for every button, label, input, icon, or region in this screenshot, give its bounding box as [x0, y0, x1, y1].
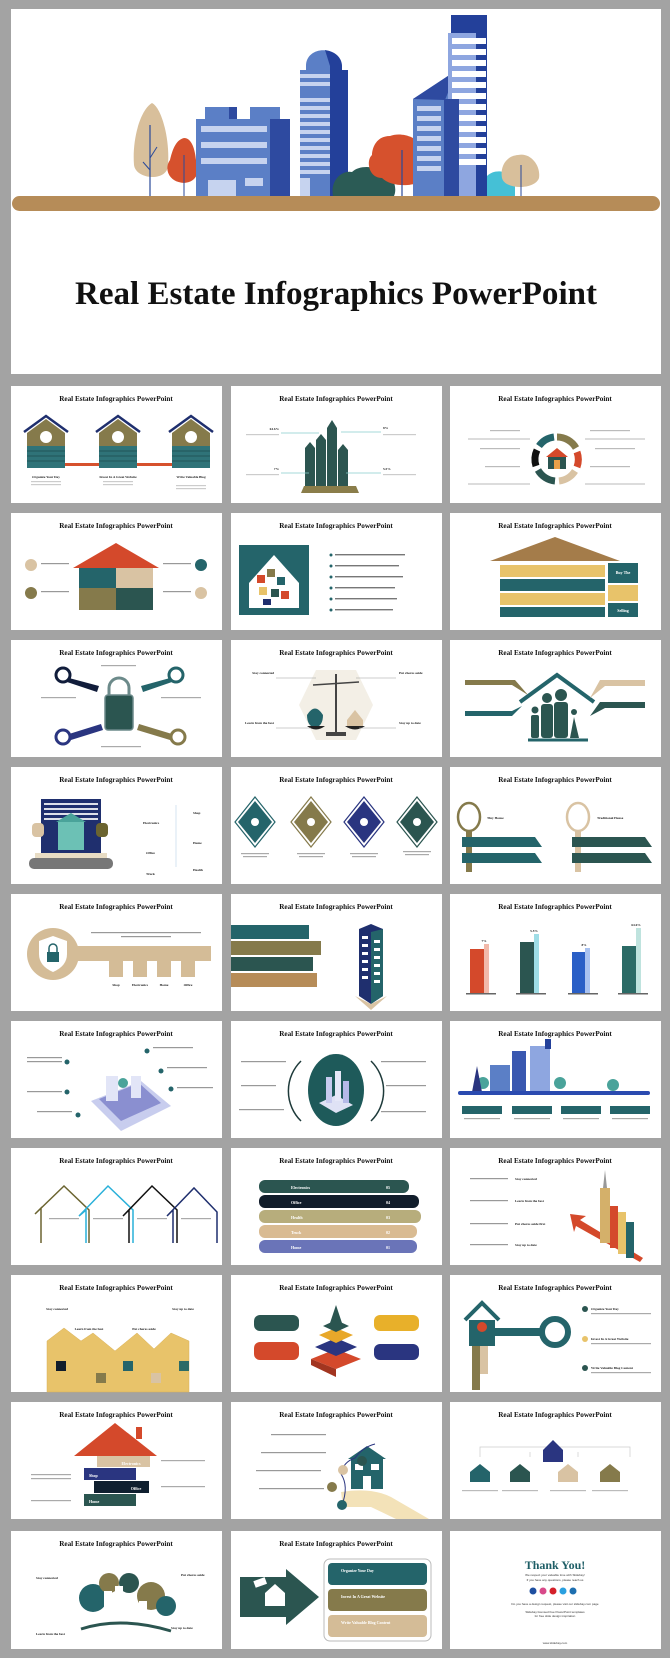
panel: thank you slide	[450, 1531, 661, 1649]
panel: slide 25 red roof stack: Electronics	[121, 1461, 141, 1466]
panel: slide 15 bar chart	[450, 894, 661, 1011]
panel: slide 25 red roof stack: Real Estate Infographics PowerPoint	[59, 1411, 173, 1419]
panel: slide 26 hand with house: Real Estate Infographics PowerPoint	[279, 1411, 393, 1419]
panel: slide 8 scales: Learn from the best	[245, 721, 275, 725]
panel: slide 28 tree city: Learn from the best	[36, 1632, 66, 1636]
panel: slide 13 big key: Shop	[112, 983, 120, 987]
panel: slide 1 houses: Real Estate Infographics PowerPoint	[59, 395, 173, 403]
panel: slide 1 houses	[11, 386, 222, 503]
icon: tan tree	[134, 103, 168, 196]
panel: slide 22 yellow houses: Stay connected	[46, 1307, 68, 1311]
panel: slide 10 building list: Health	[193, 868, 203, 872]
panel: slide 10 building list: Home	[193, 841, 202, 845]
icon: big red tree	[369, 134, 431, 196]
title: Real Estate Infographics PowerPoint	[75, 276, 597, 312]
panel: slide 19 house outlines: Real Estate Infographics PowerPoint	[59, 1157, 173, 1165]
panel: slide 25 red roof stack: Shop	[89, 1473, 98, 1478]
panel: slide 12 signpost keys: Real Estate Infographics PowerPoint	[498, 776, 612, 784]
panel: slide 3 ring: Real Estate Infographics PowerPoint	[498, 395, 612, 403]
panel: slide 13 big key: Real Estate Infographics PowerPoint	[59, 903, 173, 911]
panel: slide 22 yellow houses: Stay up to date	[172, 1307, 194, 1311]
panel: slide 19 house outlines	[11, 1148, 222, 1265]
icon: tall tower	[444, 15, 487, 196]
panel: slide 24 teal key: Organize Your Day	[591, 1307, 619, 1311]
panel: slide 13 big key: Electronics	[132, 983, 149, 987]
panel: slide 11 diamonds: Real Estate Infographics PowerPoint	[279, 776, 393, 784]
panel: slide 20 stacked bars: Health	[291, 1215, 303, 1220]
panel: slide 8 scales: Put chores aside	[399, 671, 423, 675]
panel: slide 23 pyramid	[231, 1275, 442, 1392]
panel: slide 12 signpost keys: Tiny House	[487, 816, 504, 820]
panel: slide 15 bar chart: Real Estate Infographics PowerPoint	[498, 903, 612, 911]
panel: slide 2 bar buildings: 8%	[383, 426, 389, 430]
panel: slide 22 yellow houses	[11, 1275, 222, 1392]
panel: slide 21 arrow buildings	[450, 1148, 661, 1265]
panel: slide 28 tree city: Put chores aside	[181, 1573, 205, 1577]
panel: slide 25 red roof stack	[11, 1402, 222, 1519]
panel: slide 28 tree city	[11, 1531, 222, 1649]
panel: slide 2 bar buildings	[231, 386, 442, 503]
panel: slide 22 yellow houses: Real Estate Infographics PowerPoint	[59, 1284, 173, 1292]
panel: slide 21 arrow buildings: Real Estate Infographics PowerPoint	[498, 1157, 612, 1165]
panel: slide 2 bar buildings: Real Estate Infographics PowerPoint	[279, 395, 393, 403]
panel: slide 9 family house	[450, 640, 661, 757]
panel: slide 8 scales: Stay up to date	[399, 721, 421, 725]
ground bar	[12, 196, 660, 211]
panel: slide 24 teal key	[450, 1275, 661, 1392]
panel: slide 8 scales	[231, 640, 442, 757]
panel: thank you slide: Do you have a design request, please visit our slidebay.com page	[511, 1602, 599, 1606]
panel: slide 17 teal circle city: Real Estate Infographics PowerPoint	[279, 1030, 393, 1038]
panel: slide 10 building list: Shop	[193, 811, 200, 815]
panel: slide 20 stacked bars: 01	[386, 1245, 390, 1250]
panel: slide 8 scales: Stay connected	[252, 671, 274, 675]
panel: slide 5 teal square list	[231, 513, 442, 630]
icon: cyan bush	[487, 171, 515, 196]
panel: slide 18 blue skyline timeline: Real Estate Infographics PowerPoint	[498, 1030, 612, 1038]
panel: thank you slide: Thank You!	[525, 1558, 585, 1572]
panel: slide 15 bar chart: 7%	[481, 939, 487, 943]
panel: slide 15 bar chart: 64.6%	[631, 923, 641, 927]
icon: angled tower	[413, 70, 457, 196]
panel: slide 22 yellow houses: Learn from the best	[75, 1327, 104, 1331]
panel: slide 29 arrow list: Invest In A Great Website	[341, 1594, 385, 1599]
icon: small tan tree	[502, 155, 539, 196]
panel: slide 16 isometric city: Real Estate Infographics PowerPoint	[59, 1030, 173, 1038]
panel: slide 9 family house: Real Estate Infographics PowerPoint	[498, 649, 612, 657]
panel: slide 11 diamonds	[231, 767, 442, 884]
panel: slide 24 teal key: Real Estate Infographics PowerPoint	[498, 1284, 612, 1292]
panel: slide 15 bar chart: 5.5%	[530, 929, 538, 933]
panel: slide 13 big key: Office	[184, 983, 193, 987]
panel: slide 20 stacked bars: Real Estate Infographics PowerPoint	[279, 1157, 393, 1165]
panel: slide 6 roof ribbons	[450, 513, 661, 630]
icon: green bush	[333, 167, 395, 196]
panel: slide 29 arrow list: Organize Your Day	[341, 1568, 374, 1573]
panel: slide 20 stacked bars: Office	[291, 1200, 302, 1205]
panel: slide 20 stacked bars: Home	[291, 1245, 301, 1250]
panel: slide 17 teal circle city	[231, 1021, 442, 1138]
panel: slide 13 big key	[11, 894, 222, 1011]
panel: slide 7 keys padlock	[11, 640, 222, 757]
panel: slide 22 yellow houses: Put chores aside	[132, 1327, 156, 1331]
panel: slide 21 arrow buildings: Put chores aside first	[515, 1222, 546, 1226]
panel: slide 10 building list: Electronics	[143, 821, 160, 825]
panel: slide 29 arrow list: Real Estate Infographics PowerPoint	[279, 1540, 393, 1548]
panel: slide 23 pyramid: Real Estate Infographics PowerPoint	[279, 1284, 393, 1292]
panel: thank you slide: www.slidebay.com	[543, 1641, 568, 1645]
panel: slide 25 red roof stack: Home	[89, 1499, 99, 1504]
panel: slide 20 stacked bars: 03	[386, 1215, 390, 1220]
panel: slide 21 arrow buildings: Stay up to date	[515, 1243, 537, 1247]
panel: slide 4 puzzle house	[11, 513, 222, 630]
icon: dome tower	[300, 50, 348, 196]
panel: slide 28 tree city: Stay connected	[36, 1576, 58, 1580]
icon: red tree	[167, 138, 198, 196]
panel: slide 27 org chart houses	[450, 1402, 661, 1519]
panel: slide 6 roof ribbons: Real Estate Infographics PowerPoint	[498, 522, 612, 530]
panel: slide 8 scales: Real Estate Infographics PowerPoint	[279, 649, 393, 657]
panel: slide 16 isometric city	[11, 1021, 222, 1138]
panel: slide 2 bar buildings: 64.6%	[270, 427, 280, 431]
panel: slide 20 stacked bars: 05	[386, 1185, 390, 1190]
panel: slide 13 big key: Home	[160, 983, 169, 987]
panel: slide 21 arrow buildings: Stay connected	[515, 1177, 537, 1181]
panel: slide 24 teal key: Invest In A Great Website	[591, 1337, 629, 1341]
panel: slide 15 bar chart: 8%	[581, 943, 587, 947]
panel: slide 1 houses: Invest In A Great Website	[99, 475, 137, 479]
panel: slide 20 stacked bars: 02	[386, 1230, 390, 1235]
panel: slide 25 red roof stack: Office	[131, 1486, 141, 1491]
panel: hero title slide	[11, 9, 661, 374]
panel: slide 6 roof ribbons: Buy The	[616, 570, 630, 575]
panel: slide 3 ring	[450, 386, 661, 503]
panel: slide 28 tree city: Real Estate Infographics PowerPoint	[59, 1540, 173, 1548]
panel: slide 20 stacked bars: 04	[386, 1200, 390, 1205]
panel: slide 10 building list: Office	[146, 851, 155, 855]
panel: slide 1 houses: Write Valuable Blog	[176, 475, 206, 479]
panel: slide 29 arrow list	[231, 1531, 442, 1649]
panel: slide 26 hand with house	[231, 1402, 442, 1519]
panel: slide 10 building list: Real Estate Infographics PowerPoint	[59, 776, 173, 784]
panel: slide 18 blue skyline timeline	[450, 1021, 661, 1138]
panel: thank you slide: Slidebay licensed free PowerPoint templates	[525, 1610, 585, 1614]
panel: slide 6 roof ribbons: Selling	[617, 608, 629, 613]
icon: low office building	[196, 107, 290, 196]
panel: slide 5 teal square list: Real Estate Infographics PowerPoint	[279, 522, 393, 530]
panel: slide 28 tree city: Stay up to date	[171, 1626, 193, 1630]
panel: slide 10 building list	[11, 767, 222, 884]
panel: thank you slide: for free slide design inspiration	[535, 1614, 576, 1618]
panel: thank you slide: If you have any questions, please reach us	[527, 1578, 584, 1582]
panel: slide 4 puzzle house: Real Estate Infographics PowerPoint	[59, 522, 173, 530]
panel: slide 1 houses: Organize Your Day	[32, 475, 60, 479]
panel: slide 20 stacked bars: Truck	[291, 1230, 302, 1235]
panel: slide 27 org chart houses: Real Estate Infographics PowerPoint	[498, 1411, 612, 1419]
panel: slide 21 arrow buildings: Learn from the best	[515, 1199, 545, 1203]
panel: slide 12 signpost keys: Traditional House	[597, 816, 624, 820]
panel: slide 14 ribbons skyscraper	[231, 894, 442, 1011]
panel: slide 2 bar buildings: 7%	[274, 467, 280, 471]
panel: slide 20 stacked bars: Electronics	[291, 1185, 310, 1190]
panel: slide 24 teal key: Write Valuable Blog Content	[591, 1366, 634, 1370]
panel: slide 2 bar buildings: 5.5%	[383, 467, 391, 471]
panel: slide 12 signpost keys	[450, 767, 661, 884]
panel: slide 10 building list: Truck	[146, 872, 155, 876]
panel: slide 29 arrow list: Write Valuable Blog Content	[341, 1620, 391, 1625]
panel: slide 14 ribbons skyscraper: Real Estate Infographics PowerPoint	[279, 903, 393, 911]
panel: slide 7 keys padlock: Real Estate Infographics PowerPoint	[59, 649, 173, 657]
panel: slide 20 stacked bars	[231, 1148, 442, 1265]
panel: thank you slide: We respect your valuable time with Slidebay!	[525, 1573, 585, 1577]
